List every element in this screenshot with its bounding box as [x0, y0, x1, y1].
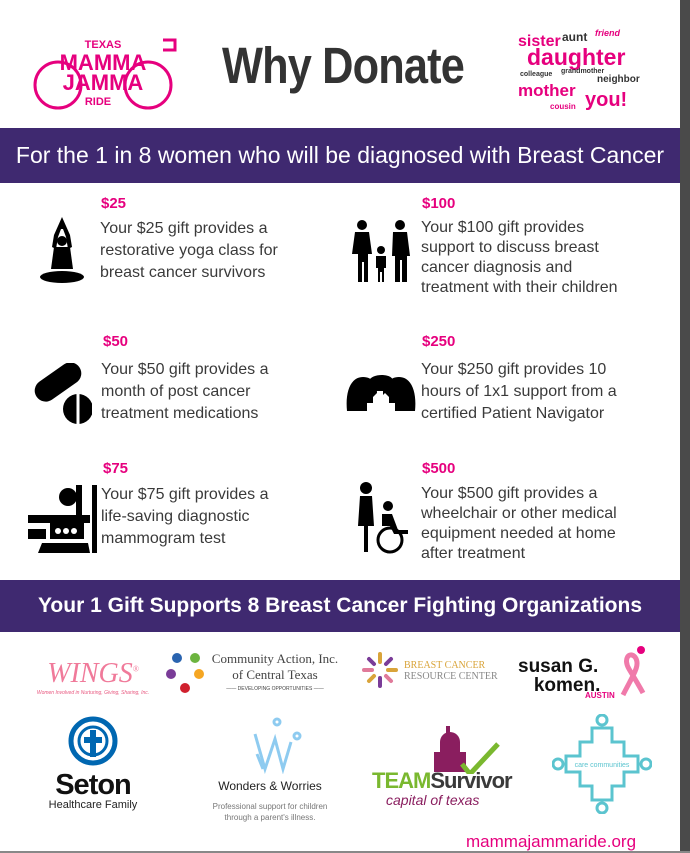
word cloud: daughter [527, 44, 625, 70]
logo: Seton: Seton [55, 769, 131, 801]
logo: Susan G. Komen [518, 646, 646, 700]
logo: Texas Mamma Jamma Ride [34, 38, 176, 110]
right gray edge [680, 0, 690, 853]
item $75: life-saving diagnostic [101, 508, 250, 525]
item $100: support to discuss breast [421, 239, 599, 256]
word cloud: cousin [550, 102, 576, 111]
title: Why Donate [222, 37, 464, 94]
item $100: Your $100 gift provides [421, 219, 584, 236]
icon: heads talking [346, 375, 416, 411]
logo: Seton: Healthcare Family [49, 799, 137, 811]
item $250: Your $250 gift provides 10 [421, 361, 606, 378]
logo: Texas Mamma Jamma Ride: MAMMA [60, 50, 146, 75]
logo: Community Action [166, 651, 338, 693]
word cloud: sister [518, 33, 561, 50]
item $50: treatment medications [101, 405, 258, 422]
item $100: $100 [422, 195, 455, 212]
icon: family [352, 220, 410, 282]
logo: WINGS: Women Involved in Nurturing, Giving, Sharing, Inc. [37, 690, 149, 696]
word cloud: aunt [562, 30, 587, 44]
logo: Team Survivor: TEAMSurvivor [372, 768, 512, 793]
icon: yoga [40, 217, 84, 283]
item $50 [34, 333, 269, 424]
item $500 [358, 460, 617, 562]
logo: WINGS [37, 658, 149, 696]
item $75: Your $75 gift provides a [101, 486, 269, 503]
item $250: hours of 1x1 support from a [421, 383, 617, 400]
item $250: certified Patient Navigator [421, 405, 604, 422]
logo: Team Survivor: capital of texas [386, 792, 479, 808]
logo: Breast Cancer Resource Center: RESOURCE CENTER [404, 671, 498, 682]
logo: Seton [49, 716, 138, 811]
logo: Texas Mamma Jamma Ride: JAMMA [63, 70, 143, 95]
item $25: $25 [101, 195, 126, 212]
band: headline: For the 1 in 8 women who will be diagnosed with Breast Cancer [16, 142, 664, 168]
logo: Susan G. Komen: AUSTIN [585, 691, 615, 700]
item $250 [346, 333, 617, 422]
item $25: Your $25 gift provides a [100, 220, 268, 237]
word cloud [518, 28, 640, 111]
word cloud: neighbor [597, 74, 640, 85]
band: supports: Your 1 Gift Supports 8 Breast Cancer Fighting Organizations [38, 594, 642, 617]
logo: Community Action: —— DEVELOPING OPPORTUNITIES —— [226, 686, 324, 692]
bottom border [0, 851, 690, 853]
item $100: cancer diagnosis and [421, 259, 572, 276]
item $75: $75 [103, 460, 128, 477]
item $250: $250 [422, 333, 455, 350]
icon: wheelchair [358, 482, 408, 554]
word cloud: colleague [520, 71, 552, 78]
logo: Texas Mamma Jamma Ride: RIDE [85, 96, 111, 108]
logo: Breast Cancer Resource Center: BREAST CANCER [404, 660, 485, 671]
logo: Breast Cancer Resource Center [362, 652, 498, 688]
item $500: wheelchair or other medical [421, 505, 617, 522]
logo: Care Communities: care communities [575, 762, 630, 769]
logo: Susan G. Komen: komen. [534, 675, 600, 696]
item $500: equipment needed at home [421, 525, 616, 542]
logo: Wonders & Worries: through a parent's illness. [225, 813, 315, 822]
band: supports [0, 580, 680, 632]
item $50: month of post cancer [101, 383, 250, 400]
item $500: after treatment [421, 545, 525, 562]
item $50: Your $50 gift provides a [101, 361, 269, 378]
word cloud: you! [585, 89, 627, 111]
logo: Susan G. Komen: susan G. [518, 656, 598, 677]
logo: Community Action: of Central Texas [232, 667, 318, 682]
word cloud: grandmother [561, 68, 604, 75]
item $500: $500 [422, 460, 455, 477]
word cloud: friend [595, 28, 621, 38]
item $100: treatment with their children [421, 279, 618, 296]
logo: Wonders & Worries: Wonders & Worries [218, 779, 322, 793]
footer url: mammajammaride.org [466, 832, 636, 851]
logo: Team Survivor [372, 726, 512, 808]
item $500: Your $500 gift provides a [421, 485, 597, 502]
word cloud: mother [518, 81, 576, 100]
icon: pills [34, 363, 92, 424]
band: headline [0, 128, 680, 183]
item $100 [352, 195, 618, 296]
item $75: mammogram test [101, 530, 225, 547]
logo: Community Action: Community Action, Inc. [212, 651, 338, 666]
logo: WINGS: WINGS® [47, 658, 139, 689]
logo: Texas Mamma Jamma Ride: TEXAS [85, 39, 121, 51]
item $50: $50 [103, 333, 128, 350]
item $25: restorative yoga class for [100, 242, 278, 259]
item $25: breast cancer survivors [100, 264, 265, 281]
item $75 [28, 460, 269, 553]
logo: Wonders & Worries: Professional support for children [213, 802, 327, 811]
logo: Wonders & Worries [213, 718, 327, 822]
logo: Care Communities [552, 714, 652, 814]
item $25 [40, 195, 278, 283]
icon: mammogram [28, 485, 97, 553]
